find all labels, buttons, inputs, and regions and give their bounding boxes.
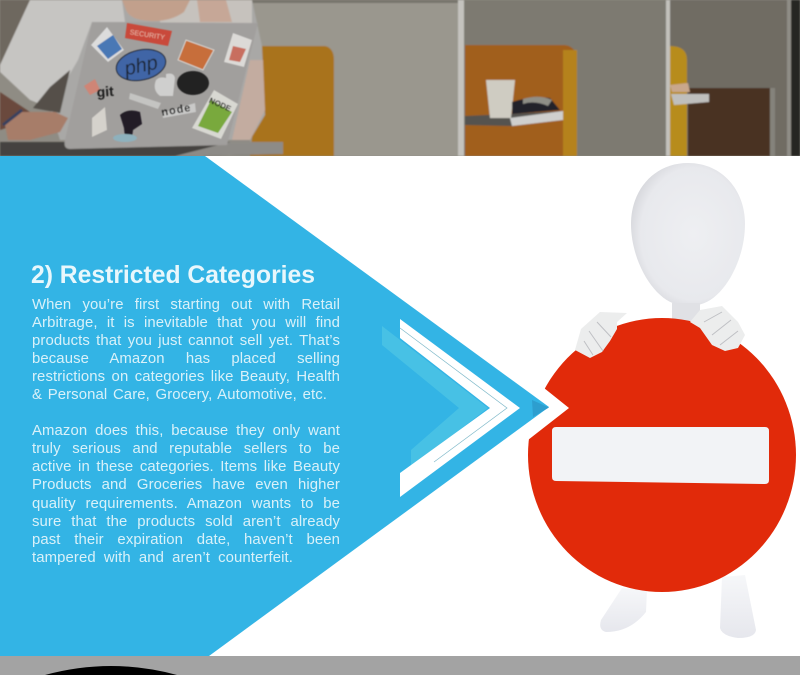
body text: Products and Groceries have even higher [32, 477, 340, 493]
body text: products that you just cannot sell yet. That’s [32, 333, 340, 349]
small shelf right [671, 94, 709, 105]
body text [32, 297, 340, 566]
footer black circle [45, 666, 177, 675]
forearm at top [197, 0, 232, 22]
laptop stickers: git [96, 83, 115, 100]
sign notch [505, 388, 569, 440]
wall beside the laptop [250, 0, 460, 156]
figure head [631, 163, 745, 305]
body text: because Amazon has placed selling [32, 351, 340, 367]
wall left of the shirt [0, 0, 30, 64]
blue arrow panel [0, 156, 549, 656]
sticker: security [125, 23, 172, 46]
body text: sure that the products sold aren’t already [32, 514, 340, 530]
grey footer strip [0, 656, 800, 675]
body text: & Personal Care, Grocery, Automotive, etc. [32, 387, 327, 403]
body text: Arbitrage, it is inevitable that you will find [32, 315, 340, 331]
no-entry sign [505, 318, 796, 592]
figure behind the sign [600, 163, 756, 638]
shirt body [30, 0, 265, 140]
laptop lid [65, 22, 258, 149]
white chevron [400, 319, 520, 497]
figure hands [575, 306, 745, 358]
arrow shape [0, 156, 549, 656]
chest [160, 0, 252, 24]
laptop stickers: php [122, 52, 160, 80]
arrow tip shade [532, 400, 549, 417]
orange booth middle [465, 45, 577, 156]
apple logo [155, 74, 175, 96]
sticker: html5 [224, 33, 252, 67]
sign disc [528, 318, 796, 592]
arm at right [232, 60, 265, 140]
shirt sleeve [0, 0, 125, 108]
face [122, 0, 190, 21]
yellow booth right [670, 46, 687, 156]
sticker: git [84, 79, 100, 95]
sign bar [552, 427, 769, 484]
body text: restrictions on categories like Beauty, Health [32, 369, 340, 385]
laptop stickers: NODE [208, 96, 233, 114]
body text: Amazon does this, because they only want [32, 423, 340, 439]
body text: active in these categories. Items like Beauty [32, 459, 340, 475]
sticker: black circle [177, 71, 209, 95]
right hand [690, 306, 745, 351]
brown cabinet [688, 88, 770, 156]
sticker: node js hexagon [192, 90, 238, 139]
sticker: label [129, 93, 161, 109]
shelf with cup and phone [465, 111, 563, 126]
body text: When you’re first starting out with Retail [32, 297, 340, 313]
body text: tampered with and aren’t counterfeit. [32, 550, 293, 566]
laptop stickers: SECURITY [129, 29, 166, 42]
left hand [575, 312, 627, 358]
orange booth left [250, 46, 334, 156]
figure feet [600, 588, 647, 632]
shadow under sleeve [33, 70, 70, 113]
heading: 2) Restricted Categories [31, 262, 315, 289]
body text: truly serious and reputable sellers to be [32, 441, 340, 457]
sticker: stack [92, 107, 107, 137]
sticker: node [162, 103, 196, 118]
wall panels [458, 0, 464, 156]
body text: past their expiration date, haven’t been [32, 532, 340, 548]
sticker: php [115, 48, 167, 82]
sticker: octocat [120, 111, 142, 138]
body text: quality requirements. Amazon wants to be [32, 496, 340, 512]
light inner chevron [382, 326, 488, 467]
sticker: orange badge [178, 40, 214, 70]
laptop stickers: node [160, 102, 192, 119]
thin chevron line [400, 328, 507, 462]
table [0, 141, 229, 156]
laptop stickers [84, 23, 252, 142]
left arm and hand [0, 92, 30, 130]
figure neck [672, 303, 700, 321]
sticker: css [91, 27, 124, 62]
header photo: developer at laptop [0, 0, 800, 156]
